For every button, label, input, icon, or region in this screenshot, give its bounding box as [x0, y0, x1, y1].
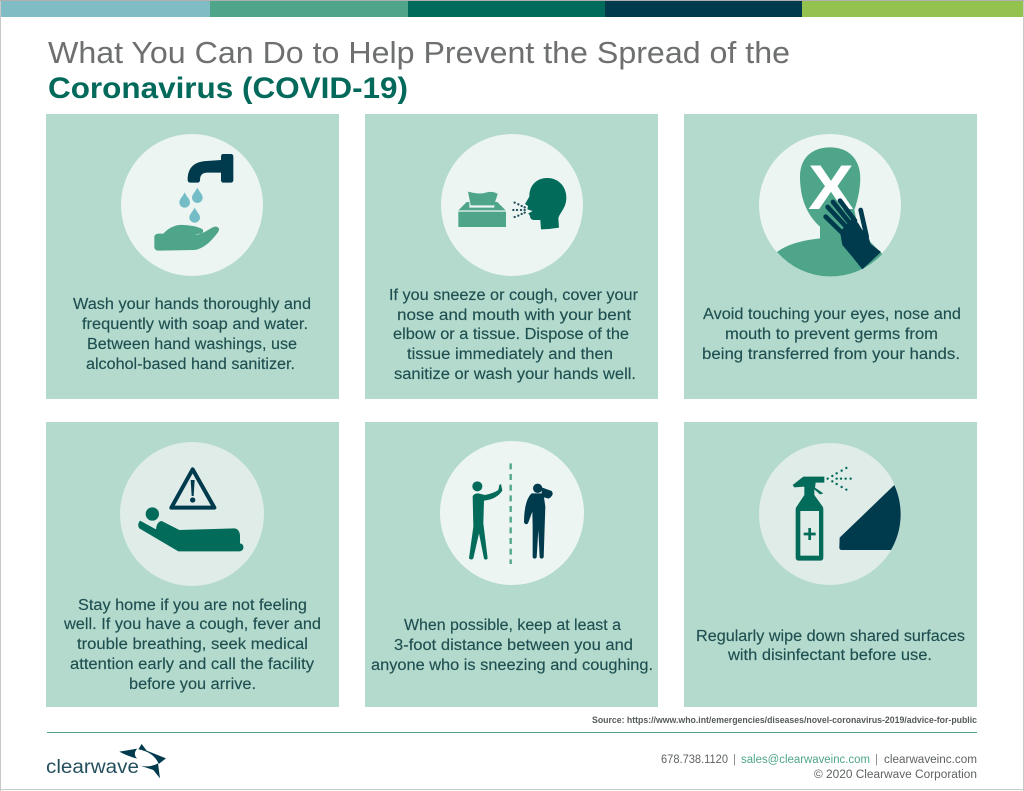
- text: avoid touching face: [702, 306, 961, 363]
- icon: clearwave swoosh mark: [119, 744, 166, 778]
- icon: two people separated by dashed line: [469, 463, 553, 564]
- top colour bar: [1, 1, 1023, 17]
- text: keep distance: When possible, keep at least a: [404, 617, 621, 634]
- text: wash hands: alcohol-based hand sanitizer.: [86, 356, 295, 373]
- text: stay home: attention early and call the facility: [70, 656, 314, 673]
- logo: clearwave: [46, 744, 166, 778]
- icon: faucet, water drops and hand: [154, 154, 233, 251]
- panel: avoid touching face: [684, 114, 977, 399]
- text: keep distance: anyone who is sneezing and coughing.: [371, 657, 653, 674]
- title: Coronavirus (COVID-19): [48, 72, 408, 105]
- title: [48, 35, 790, 105]
- text: disinfect surfaces: Regularly wipe down shared surfaces: [696, 628, 965, 645]
- contact details: [661, 754, 977, 781]
- text: stay home: trouble breathing, seek medical: [77, 636, 308, 653]
- text: avoid touching face: Avoid touching your eyes, nose and: [703, 306, 961, 323]
- icon: face with X and hand: X: [808, 151, 854, 222]
- text: stay home: Stay home if you are not feeling: [78, 597, 307, 614]
- icon: spray bottle and surface: [793, 467, 901, 561]
- title: What You Can Do to Help Prevent the Spread of the: [48, 35, 790, 70]
- panel: stay home: [46, 422, 339, 707]
- text: wash hands: frequently with soap and water.: [82, 316, 308, 333]
- icon: face with X and hand: [777, 147, 882, 276]
- contact details: |: [733, 754, 736, 766]
- text: stay home: before you arrive.: [129, 676, 256, 693]
- text: wash hands: [73, 296, 311, 373]
- text: cover sneeze or cough: nose and mouth with your bent: [397, 307, 632, 324]
- text: keep distance: [371, 617, 653, 674]
- icon: tissue box and sneezing head: [458, 178, 566, 229]
- logo: clearwave: clearwave: [46, 757, 139, 778]
- text: wash hands: Between hand washings, use: [87, 336, 297, 353]
- text: wash hands: Wash your hands thoroughly and: [73, 296, 311, 313]
- text: cover sneeze or cough: [389, 287, 638, 383]
- contact details: |: [875, 754, 878, 766]
- source note: Source: https://www.who.int/emergencies/diseases/novel-coronavirus-2019/advice-for-public: [592, 715, 977, 725]
- text: avoid touching face: mouth to prevent germs from: [725, 326, 938, 343]
- contact details: sales@clearwaveinc.com: [741, 754, 870, 766]
- contact details: 678.738.1120: [661, 754, 728, 766]
- panel: wash hands: [46, 114, 339, 399]
- text: cover sneeze or cough: If you sneeze or cough, cover your: [389, 287, 638, 304]
- icon: warning triangle and person in bed: [138, 469, 243, 551]
- contact details: © 2020 Clearwave Corporation: [814, 769, 977, 781]
- text: cover sneeze or cough: sanitize or wash your hands well.: [394, 366, 636, 383]
- text: disinfect surfaces: [696, 628, 965, 664]
- text: avoid touching face: being transferred from your hands.: [702, 346, 960, 363]
- panel: keep distance: [365, 422, 658, 707]
- text: stay home: [63, 597, 321, 693]
- text: cover sneeze or cough: tissue immediately and then: [407, 346, 613, 363]
- contact details: clearwaveinc.com: [884, 754, 977, 766]
- text: stay home: well. If you have a cough, fever and: [63, 616, 321, 633]
- text: keep distance: 3-foot distance between you and: [394, 637, 633, 654]
- panel: disinfect surfaces: [684, 422, 977, 707]
- text: disinfect surfaces: with disinfectant before use.: [727, 647, 932, 664]
- panel: cover sneeze or cough: [365, 114, 658, 399]
- text: cover sneeze or cough: elbow or a tissue. Dispose of the: [393, 326, 629, 343]
